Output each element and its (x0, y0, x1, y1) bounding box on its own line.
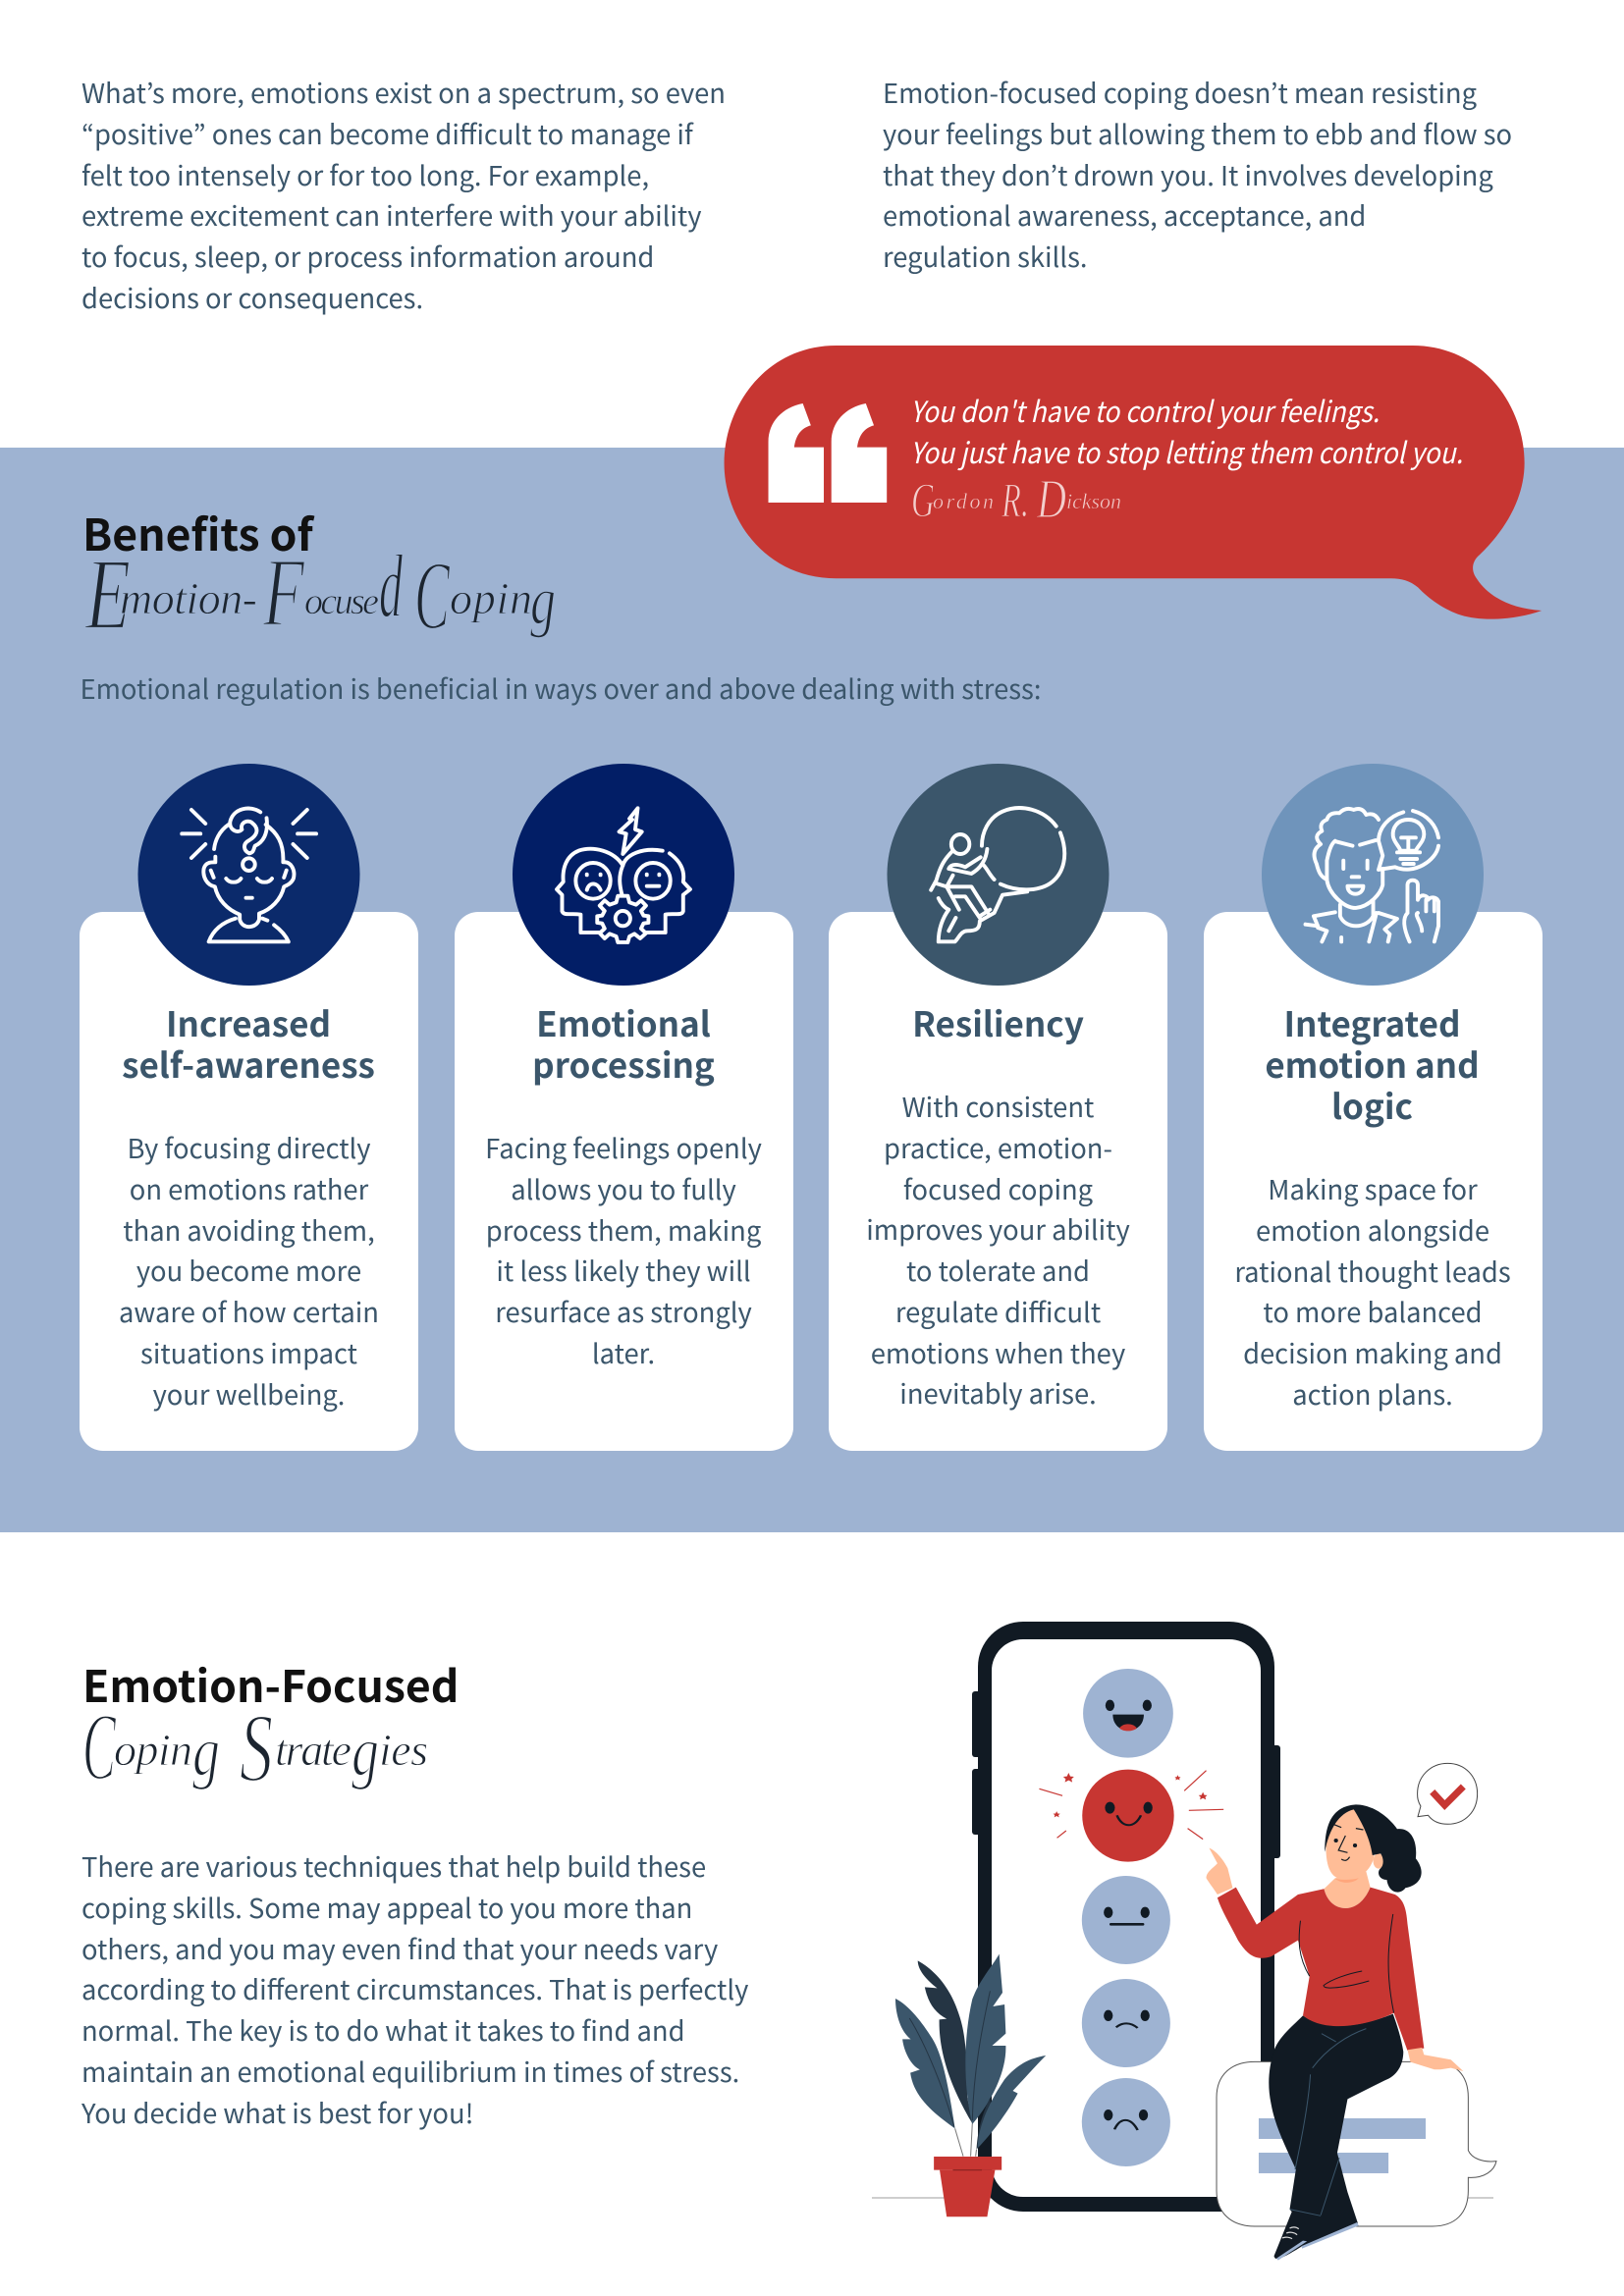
card body text: on emotions rather (130, 1168, 368, 1207)
card: increased self-awareness (80, 764, 418, 1451)
callout: red quote speech bubble: You just have to stop letting them control you. (910, 431, 1463, 472)
phone (972, 1622, 1280, 2212)
text block: emotion-focused coping definition: regulation skills. (883, 236, 1087, 275)
card body text: By focusing directly (127, 1127, 371, 1166)
card body text: improves your ability (866, 1208, 1130, 1248)
card body text: aware of how certain (119, 1291, 379, 1330)
card body text: situations impact (140, 1332, 357, 1371)
text block: emotion-focused coping definition: that they don’t drown you. It involves developing (883, 153, 1493, 192)
callout: red quote speech bubble: You don't have to control your feelings. (910, 390, 1380, 431)
heading: script subtitle Emotion-Focused Coping (84, 545, 556, 651)
text block: strategies intro (81, 1845, 748, 2130)
text block: spectrum of emotions: decisions or consequences. (81, 277, 423, 316)
card title (122, 997, 375, 1089)
card title: Resiliency (912, 997, 1084, 1047)
mood face: neutral (1082, 1876, 1170, 1964)
card title (532, 997, 715, 1089)
card body text (1234, 1168, 1511, 1413)
text block: benefits intro: Emotional regulation is beneficial in ways over and above dealing with stress: (81, 667, 1041, 707)
speech box with text bars (1217, 2061, 1496, 2226)
card body text (866, 1086, 1130, 1412)
card body text: focused coping (903, 1168, 1093, 1207)
heading: script subtitle Coping Strategies: g (192, 1712, 220, 1790)
heading: script subtitle Coping Strategies (82, 1703, 428, 1802)
card title (1265, 997, 1480, 1129)
card: resiliency (829, 764, 1167, 1451)
card title: self-awareness (122, 1039, 375, 1089)
mood face: happy highlighted in red (1039, 1770, 1223, 1862)
icon: person with lightbulb idea (1262, 764, 1484, 986)
card body text: you become more (136, 1250, 361, 1289)
legs and shoes (1269, 2014, 1403, 2261)
heading: script subtitle Emotion-Focused Coping: ocuse (304, 581, 379, 622)
card body text: resurface as strongly (495, 1291, 752, 1330)
card body text: emotion alongside (1256, 1209, 1489, 1249)
card body text: allows you to fully (511, 1168, 736, 1207)
icon: figure pushing boulder (888, 764, 1110, 986)
upper body (1207, 1804, 1463, 2071)
text block: strategies intro: others, and you may even find that your needs vary (81, 1928, 718, 1967)
card body text (119, 1127, 379, 1412)
card body text: than avoiding them, (123, 1209, 375, 1249)
card body text: With consistent (902, 1086, 1094, 1125)
card title: emotion and (1265, 1039, 1480, 1089)
card body text: emotions when they (871, 1331, 1125, 1370)
card body text: later. (592, 1332, 655, 1371)
card title: processing (532, 1039, 715, 1089)
card: emotional processing (455, 764, 793, 1451)
mood face: sad (1082, 2078, 1170, 2166)
potted plant (895, 1954, 1046, 2216)
callout: red quote speech bubble (725, 346, 1542, 619)
callout: red quote speech bubble: R. (1001, 472, 1029, 527)
heading: script subtitle Coping Strategies: ies (379, 1725, 428, 1775)
text block: strategies intro: There are various techniques that help build these (81, 1845, 706, 1885)
callout: red quote speech bubble: ordon (933, 489, 994, 513)
text block: emotion-focused coping definition (883, 72, 1512, 275)
card body text: practice, emotion- (884, 1127, 1112, 1166)
card title: Emotional (536, 997, 711, 1047)
card body text: Making space for (1268, 1168, 1478, 1207)
card title: logic (1331, 1080, 1413, 1129)
card body text: to tolerate and (906, 1250, 1090, 1289)
callout: red quote speech bubble: ickson (1066, 489, 1121, 513)
text block: emotion-focused coping definition: Emotion-focused coping doesn’t mean resisting (883, 72, 1477, 111)
text block: emotion-focused coping definition: emotional awareness, acceptance, and (883, 194, 1366, 234)
icon: two heads with gear and bolt (513, 764, 734, 986)
text block: spectrum of emotions (81, 72, 726, 316)
text block: spectrum of emotions: extreme excitement can interfere with your ability (81, 194, 701, 234)
mood face: slightly sad (1082, 1979, 1170, 2067)
heading: script subtitle Coping Strategies: opin (114, 1725, 192, 1775)
heading: script subtitle Coping Strategies: trate (275, 1725, 352, 1775)
card body text: decision making and (1243, 1332, 1502, 1371)
text block: spectrum of emotions: to focus, sleep, or process information around (81, 236, 654, 275)
card body text: process them, making (486, 1209, 761, 1249)
heading: script subtitle Emotion-Focused Coping: opin (450, 573, 532, 623)
text block: strategies intro: maintain an emotional equilibrium in times of stress. (81, 2051, 739, 2090)
callout: red quote speech bubble: G (911, 472, 935, 527)
card body text (485, 1127, 762, 1371)
card: integrated emotion and logic (1204, 764, 1543, 1451)
text block: strategies intro: according to different circumstances. That is perfectly (81, 1968, 748, 2007)
heading: script subtitle Emotion-Focused Coping: motion- (120, 573, 257, 623)
ground line (872, 2197, 1493, 2199)
text block: spectrum of emotions: felt too intensely or for too long. For example, (81, 153, 649, 192)
icon: head with question mark (137, 764, 359, 986)
card body text: rational thought leads (1234, 1251, 1511, 1290)
callout: red quote speech bubble: D (1036, 469, 1066, 530)
panel: benefits background band (0, 448, 1624, 1532)
text block: strategies intro: coping skills. Some may appeal to you more than (81, 1887, 692, 1926)
heading: Emotion-Focused: Emotion-Focused (82, 1651, 459, 1715)
card body text: regulate difficult (895, 1291, 1101, 1330)
card body text: Facing feelings openly (485, 1127, 762, 1166)
card body text: it less likely they will (496, 1250, 751, 1289)
text block: spectrum of emotions: “positive” ones can become difficult to manage if (81, 113, 693, 152)
thought bubble with red check mark (1418, 1763, 1478, 1824)
card title: Integrated (1283, 997, 1461, 1047)
heading: script subtitle Emotion-Focused Coping: g (530, 563, 556, 639)
card title: Increased (166, 997, 331, 1047)
card body text: inevitably arise. (899, 1372, 1097, 1412)
heading: script subtitle Coping Strategies: g (352, 1712, 379, 1790)
text block: emotion-focused coping definition: your feelings but allowing them to ebb and flow so (883, 113, 1512, 152)
heading: Benefits of: Benefits of (82, 500, 313, 563)
card body text: action plans. (1292, 1373, 1453, 1413)
text block: strategies intro: You decide what is best for you! (81, 2091, 473, 2130)
mood face: laughing (1083, 1669, 1173, 1758)
text block: strategies intro: normal. The key is to do what it takes to find and (81, 2009, 685, 2049)
card body text: to more balanced (1263, 1291, 1483, 1330)
card body text: your wellbeing. (153, 1372, 345, 1412)
text block: spectrum of emotions: What’s more, emotions exist on a spectrum, so even (81, 72, 726, 111)
illustration: woman pointing at phone of mood faces (872, 1622, 1497, 2260)
woman sitting and pointing (1207, 1804, 1463, 2261)
